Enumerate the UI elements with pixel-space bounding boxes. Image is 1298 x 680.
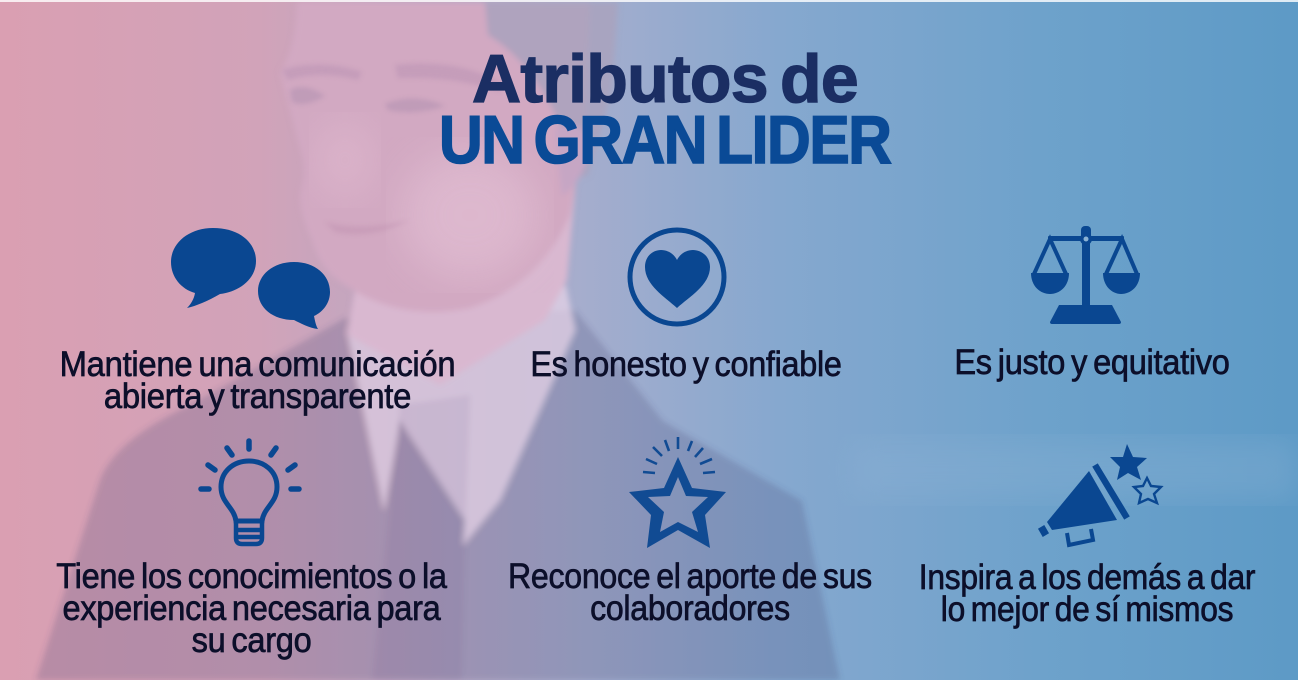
text: honesto: Es honesto y confiable [530, 345, 842, 384]
text: inspira: Inspira a los demás a dar [919, 558, 1255, 597]
icon: light bulb [201, 441, 299, 544]
icon: megaphone with stars [1039, 444, 1161, 545]
text: comunicación [60, 345, 455, 416]
icon: scales of justice [1031, 226, 1140, 324]
icon: star with rays [629, 437, 726, 548]
text: reconoce [508, 557, 872, 628]
text: inspira [919, 558, 1256, 629]
text: inspira: lo mejor de sí mismos [941, 590, 1233, 629]
text: conocimientos [56, 557, 448, 660]
icon: speech bubbles [171, 228, 330, 329]
text: reconoce: colaboradores [590, 589, 790, 628]
title [439, 41, 892, 178]
icon: heart in circle [630, 230, 724, 324]
text: justo: Es justo y equitativo [954, 343, 1230, 382]
text: comunicación: Mantiene una comunicación [60, 345, 455, 384]
text: comunicación: abierta y transparente [104, 377, 411, 416]
text: conocimientos: su cargo [192, 621, 311, 660]
text: conocimientos: Tiene los conocimientos o la [56, 557, 447, 596]
text: conocimientos: experiencia necesaria para [62, 589, 441, 628]
title line 2: UN GRAN LIDER [439, 102, 891, 178]
title line 1: Atributos de [472, 41, 858, 117]
text: reconoce: Reconoce el aporte de sus [508, 557, 872, 596]
